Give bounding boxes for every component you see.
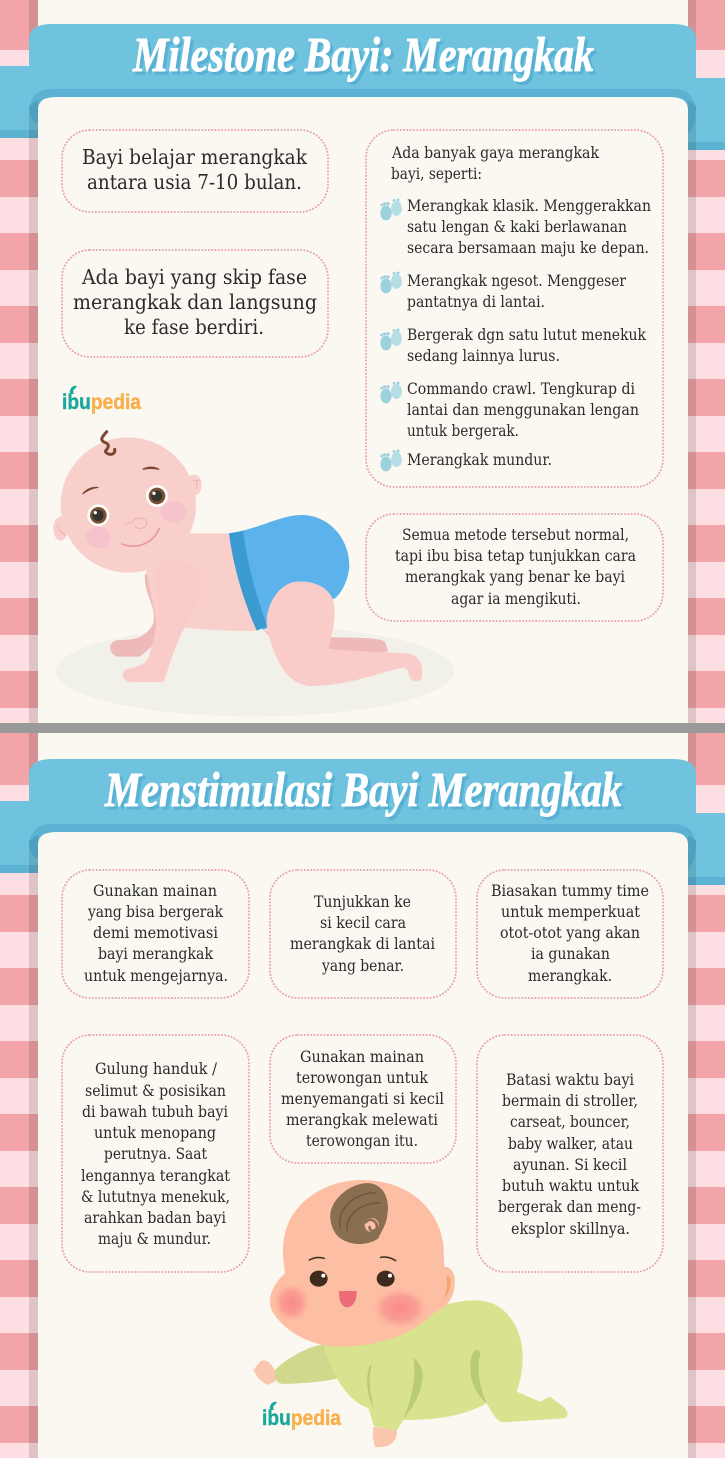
- panel: gaya merangkak list: satu lengan & kaki berlawanan: [407, 217, 627, 236]
- callout: semua metode normal: agar ia mengikuti.: [451, 589, 581, 608]
- panel: gaya merangkak list: pantatnya di lantai.: [407, 292, 545, 311]
- tip: tunjukkan cara: merangkak di lantai: [290, 934, 435, 953]
- callout: skip fase: merangkak dan langsung: [73, 290, 317, 314]
- panel: gaya merangkak list: [366, 130, 663, 487]
- callout: semua metode normal: Semua metode tersebut normal,: [402, 525, 629, 544]
- tip: tunjukkan cara: [270, 870, 456, 998]
- tip: mainan bergerak: Gunakan mainan: [93, 881, 217, 900]
- tip: mainan bergerak: yang bisa bergerak: [87, 902, 223, 921]
- panel: milestone ribbon banner: [0, 0, 725, 723]
- tip: tunjukkan cara: yang benar.: [321, 956, 404, 975]
- icon: baby feet 4: [380, 382, 402, 404]
- icon: baby feet 5: [380, 450, 402, 472]
- tip: gulung handuk: [62, 1035, 249, 1272]
- callout: usia merangkak: [62, 130, 328, 212]
- tip: mainan bergerak: untuk mengejarnya.: [84, 966, 228, 985]
- panel: gaya merangkak list: secara bersamaan maju ke depan.: [407, 238, 649, 257]
- tip: batasi waktu: carseat, bouncer,: [510, 1112, 630, 1131]
- tip: mainan bergerak: demi memotivasi: [93, 923, 218, 942]
- separator bar: [0, 723, 725, 733]
- tip: gulung handuk: selimut & posisikan: [85, 1081, 226, 1100]
- tip: mainan bergerak: bayi merangkak: [98, 944, 213, 963]
- panel: gaya merangkak list: bayi, seperti:: [391, 164, 482, 183]
- tip: batasi waktu: Batasi waktu bayi: [506, 1070, 634, 1089]
- tip: mainan bergerak: [62, 870, 249, 998]
- panel: gaya merangkak list: Ada banyak gaya merangkak: [391, 143, 599, 162]
- icon: baby feet 1: [380, 198, 402, 220]
- illustration: crawling baby in blue diaper: [53, 432, 454, 717]
- callout: skip fase: Ada bayi yang skip fase: [81, 265, 307, 289]
- tip: gulung handuk: maju & mundur.: [98, 1229, 211, 1248]
- icon: baby feet 2: [380, 272, 402, 294]
- tip: gulung handuk: & lututnya menekuk,: [81, 1187, 230, 1206]
- panel: stimulasi cream background: [38, 832, 688, 1458]
- panel: gaya merangkak list: Bergerak dgn satu lutut menekuk: [407, 325, 646, 344]
- tip: tummy time: Biasakan tummy time: [491, 881, 649, 900]
- tip: batasi waktu: butuh waktu untuk: [502, 1176, 639, 1195]
- tip: tunjukkan cara: Tunjukkan ke: [314, 892, 411, 911]
- tip: tunjukkan cara: si kecil cara: [320, 913, 406, 932]
- panel: gaya merangkak list: untuk bergerak.: [407, 421, 519, 440]
- panel: gaya merangkak list: sedang lainnya lurus.: [407, 346, 560, 365]
- tip: gulung handuk: di bawah tubuh bayi: [82, 1102, 228, 1121]
- panel: gaya merangkak list: Merangkak klasik. Menggerakkan: [407, 196, 651, 215]
- tip: mainan terowongan: terowongan untuk: [296, 1068, 428, 1087]
- callout: skip fase: [62, 250, 328, 357]
- tip: gulung handuk: perutnya. Saat: [104, 1144, 207, 1163]
- tip: batasi waktu: baby walker, atau: [508, 1134, 633, 1153]
- panel: gaya merangkak list: Commando crawl. Tengkurap di: [407, 379, 635, 398]
- tip: mainan terowongan: Gunakan mainan: [300, 1047, 424, 1066]
- tip: tummy time: untuk memperkuat: [501, 902, 641, 921]
- tip: gulung handuk: lengannya terangkat: [81, 1166, 230, 1185]
- tip: gulung handuk: arahkan badan bayi: [84, 1208, 226, 1227]
- title: Menstimulasi Bayi Merangkak: Menstimulasi Bayi Merangkak: [104, 762, 622, 817]
- callout: usia merangkak: antara usia 7-10 bulan.: [87, 170, 302, 194]
- tip: tummy time: merangkak.: [528, 966, 612, 985]
- tip: tummy time: ia gunakan: [531, 944, 610, 963]
- tip: batasi waktu: bergerak dan meng-: [498, 1197, 641, 1216]
- panel: gaya merangkak list: Merangkak ngesot. Menggeser: [407, 271, 626, 290]
- callout: semua metode normal: tapi ibu bisa tetap tunjukkan cara: [395, 546, 636, 565]
- tip: mainan terowongan: menyemangati si kecil: [281, 1089, 444, 1108]
- illustration: crawling baby in green onesie: [253, 1180, 568, 1447]
- tip: mainan terowongan: terowongan itu.: [306, 1131, 418, 1150]
- panel: stimulasi ribbon banner: [0, 733, 725, 1458]
- tip: batasi waktu: bermain di stroller,: [502, 1091, 638, 1110]
- tip: mainan terowongan: merangkak melewati: [286, 1110, 438, 1129]
- tip: mainan terowongan: [270, 1035, 456, 1163]
- callout: semua metode normal: [366, 514, 663, 621]
- tip: batasi waktu: eksplor skillnya.: [511, 1219, 630, 1238]
- tip: batasi waktu: ayunan. Si kecil: [513, 1155, 627, 1174]
- panel: gaya merangkak list: Merangkak mundur.: [407, 450, 552, 469]
- tip: tummy time: [477, 870, 663, 998]
- callout: skip fase: ke fase berdiri.: [124, 315, 264, 339]
- tip: tummy time: otot-otot yang akan: [500, 923, 640, 942]
- title: Milestone Bayi: Milestone Bayi: Merangkak: [132, 27, 594, 82]
- panel: gaya merangkak list: lantai dan menggunakan lengan: [407, 400, 639, 419]
- panel: milestone cream background: [38, 97, 688, 723]
- callout: usia merangkak: Bayi belajar merangkak: [82, 145, 308, 169]
- icon: baby feet 3: [380, 328, 402, 350]
- tip: gulung handuk: untuk menopang: [94, 1123, 216, 1142]
- logo: ibupedia bottom: ibupedia: [262, 1407, 341, 1430]
- callout: semua metode normal: merangkak yang benar ke bayi: [405, 567, 625, 586]
- tip: batasi waktu: [477, 1035, 663, 1272]
- logo: ibupedia top: ibupedia: [62, 391, 141, 414]
- tip: gulung handuk: Gulung handuk /: [95, 1059, 218, 1078]
